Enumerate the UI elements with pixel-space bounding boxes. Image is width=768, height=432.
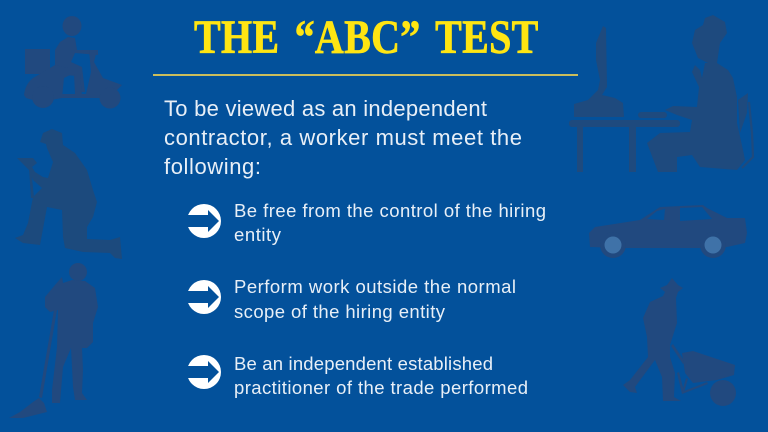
text: scope: scope of the hiring entity	[234, 301, 446, 322]
intro text: To be viewed as an independent	[164, 96, 487, 121]
icon: arrow 3	[186, 355, 221, 389]
bullet 3	[186, 353, 528, 398]
text: practitioner: practitioner of the trade performed	[234, 377, 528, 398]
text: scope	[234, 276, 516, 322]
icon: car	[589, 205, 747, 258]
text: control: entity	[234, 224, 282, 245]
text: practitioner: Be an independent established	[234, 353, 493, 374]
bullet 1	[186, 200, 546, 245]
icon: arrow 2	[186, 280, 221, 314]
intro text: following:	[164, 154, 261, 179]
title: THE “ABC” TEST	[194, 12, 539, 64]
icon: arrow 1	[186, 204, 221, 238]
text: control: Be free from the control of the hiring	[234, 200, 546, 221]
icon: person at computer desk	[569, 15, 753, 172]
icon: scooter delivery rider	[24, 16, 122, 108]
text: practitioner	[234, 353, 528, 398]
icon: kneeling worker with drill	[15, 129, 122, 259]
text: control	[234, 200, 546, 245]
icon: worker pushing wheelbarrow	[623, 278, 736, 406]
intro text	[164, 96, 522, 179]
icon: worker with mop	[9, 263, 98, 418]
text: scope: Perform work outside the normal	[234, 276, 516, 297]
bullet 2	[186, 276, 516, 322]
intro text: contractor, a worker must meet the	[164, 125, 522, 150]
